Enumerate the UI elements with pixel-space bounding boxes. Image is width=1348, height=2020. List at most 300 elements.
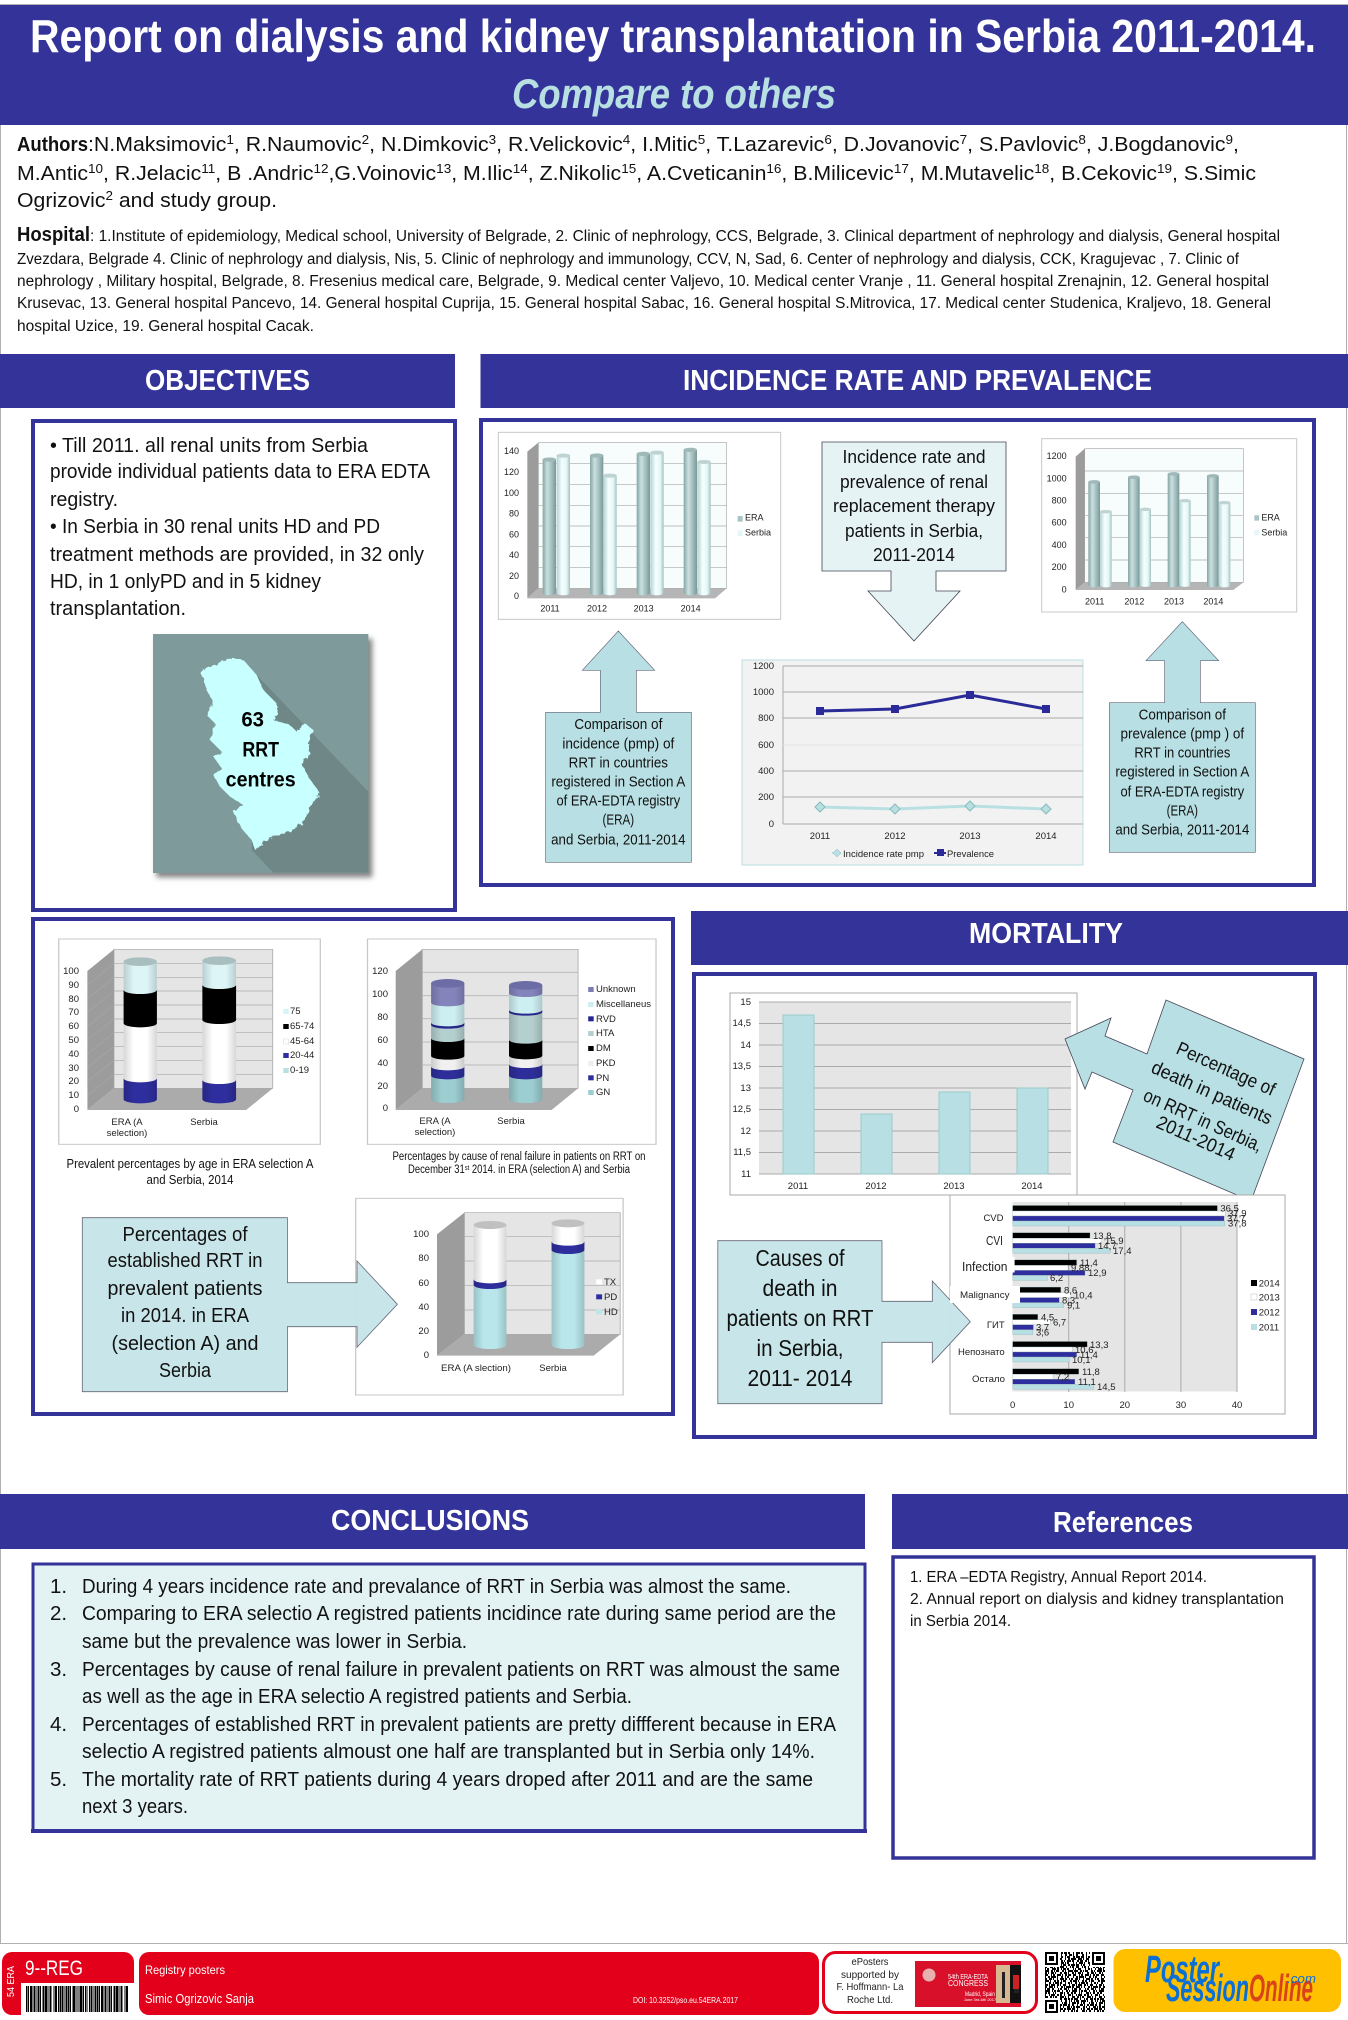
authors: , R.Jelacic <box>103 162 201 185</box>
chart: incidence comparison 3D columns: Serbia <box>745 527 771 537</box>
chart: causes of death: 40 <box>1232 1400 1242 1411</box>
heading: conclusions: CONCLUSIONS <box>331 1505 529 1537</box>
authors: , D.Jovanovic <box>832 133 960 156</box>
chart: percentages by age: 75 <box>290 1006 301 1017</box>
conclusions list: next 3 years. <box>82 1795 188 1818</box>
authors: , T.Lazarevic <box>705 133 824 156</box>
chart: percentage of death per year <box>730 993 1077 1195</box>
chart: percentages by cause of renal failure: ERA (A <box>419 1116 451 1127</box>
chart: percentages by age <box>59 939 320 1144</box>
chart: incidence comparison 3D columns: ERA <box>745 512 763 522</box>
callout: comparison of prevalence: of ERA-EDTA registry <box>1120 785 1245 801</box>
chart: percentages by age: 20 <box>68 1076 79 1087</box>
chart: percentage of death per year: 12 <box>740 1126 751 1137</box>
chart: established RRT modality: Serbia <box>539 1363 567 1374</box>
chart: causes of death: 0 <box>1010 1400 1015 1411</box>
chart: prevalence comparison 3D columns <box>1042 439 1297 612</box>
chart: established RRT modality: 20 <box>418 1326 429 1337</box>
authors: 9 <box>1226 132 1233 147</box>
chart: percentages by age: Serbia <box>190 1117 218 1128</box>
chart: causes of death: 11,1 <box>1078 1377 1096 1388</box>
chart: percentage of death per year: 2012 <box>865 1181 887 1192</box>
chart: causes of death: Остало <box>972 1374 1005 1385</box>
panel: incidence rate and prevalence <box>481 420 1314 885</box>
chart: percentage of death per year: 14,5 <box>732 1018 751 1029</box>
callout: incidence rate and prevalence down arrow: replacement therapy <box>833 495 996 516</box>
chart: percentages by age: 30 <box>68 1063 79 1074</box>
chart: incidence and prevalence in Serbia line chart: 200 <box>758 792 774 803</box>
chart: percentages by age: ERA (A <box>111 1117 143 1128</box>
authors: 13 <box>436 161 451 176</box>
callout: comparison of prevalence: and Serbia, 2011-2014 <box>1115 822 1249 838</box>
hospitals <box>17 224 1280 335</box>
chart: causes of death <box>718 1195 1285 1414</box>
chart: causes of death: 2012 <box>1259 1308 1280 1318</box>
authors: , B.Cekovic <box>1049 162 1157 185</box>
panel: objectives <box>33 421 455 910</box>
footer: category and author strip: Registry posters <box>145 1963 225 1977</box>
authors: , Z.Nikolic <box>528 162 621 185</box>
chart: percentage of death per year: 12,5 <box>732 1104 751 1115</box>
authors: , S.Simic <box>1172 162 1256 185</box>
conclusions list: Percentages by cause of renal failure in prevalent patients on RRT was almoust the same <box>82 1658 840 1681</box>
authors: ,G.Voinovic <box>328 162 436 185</box>
chart: established RRT modality: HD <box>604 1307 618 1318</box>
chart: incidence comparison 3D columns: 120 <box>504 467 519 477</box>
chart: prevalence comparison 3D columns: 2011 <box>1085 596 1104 606</box>
authors: 4 <box>623 132 630 147</box>
title banner <box>0 5 1348 125</box>
chart: prevalence comparison 3D columns: 1200 <box>1047 451 1067 461</box>
chart: prevalence comparison 3D columns: 2014 <box>1203 596 1223 606</box>
chart: percentage of death per year: 13 <box>740 1083 751 1094</box>
chart: incidence comparison 3D columns: 2014 <box>681 603 701 613</box>
chart: percentages by age: 0-19 <box>290 1065 309 1076</box>
references list <box>910 1569 1284 1630</box>
heading: references <box>892 1494 1348 1549</box>
chart: causes of death: CVD <box>983 1213 1004 1224</box>
conclusions list: as well as the age in ERA selectio A registred patients and Serbia. <box>82 1685 632 1708</box>
footer: poster id badge: 54 ERA <box>6 1966 17 1997</box>
callout: causes of death arrow <box>718 1241 970 1404</box>
barcode <box>26 1986 129 2012</box>
callout: causes of death arrow: Causes of <box>756 1245 845 1271</box>
heading: mortality <box>691 911 1348 965</box>
chart: percentages by cause of renal failure: PKD <box>596 1058 616 1069</box>
chart: causes of death: 36,5 <box>1220 1204 1239 1214</box>
chart: prevalence comparison 3D columns: 2013 <box>1164 596 1184 606</box>
chart: percentages by age: 0 <box>74 1104 79 1115</box>
callout: comparison of incidence <box>546 631 691 862</box>
callout: incidence rate and prevalence down arrow: patients in Serbia, <box>845 520 983 541</box>
chart: percentage of death per year: 2011 <box>788 1181 808 1192</box>
chart: percentages by age: 90 <box>68 980 79 991</box>
callout: causes of death arrow: in Serbia, <box>756 1335 844 1361</box>
callout: comparison of incidence: Comparison of <box>574 717 663 733</box>
conclusions list: 3. <box>50 1658 67 1681</box>
panel: demographics charts <box>33 919 673 1414</box>
chart: causes of death: 2013 <box>1259 1292 1280 1304</box>
map: Serbia with 63 RRT centres: 63 <box>241 708 264 732</box>
conclusions list: Comparing to ERA selectio A registred patients incidince rate during same period are the <box>82 1602 836 1625</box>
chart: causes of death: 37,8 <box>1228 1218 1246 1230</box>
objectives text <box>50 434 430 620</box>
chart: percentages by cause of renal failure: GN <box>596 1087 610 1098</box>
chart: incidence comparison 3D columns: 40 <box>509 550 519 560</box>
congress banner: 54th ERA-EDTA <box>948 1974 988 1981</box>
chart: causes of death: 10,4 <box>1074 1290 1092 1301</box>
callout: percentage of death rotated arrow <box>1065 1000 1304 1201</box>
chart: percentages by age: 80 <box>68 994 79 1005</box>
footer: PosterSessionOnline logo: Poster <box>1145 1949 1220 1991</box>
caption: cause chart: st <box>465 1165 469 1172</box>
congress banner: Madrid, Spain <box>965 1992 995 1998</box>
heading: objectives: OBJECTIVES <box>145 365 310 397</box>
chart: causes of death: 10 <box>1063 1400 1074 1411</box>
chart: causes of death: 11,4 <box>1080 1258 1098 1269</box>
callout: comparison of incidence: registered in Section A <box>551 775 686 791</box>
callout: comparison of incidence: of ERA-EDTA registry <box>556 794 681 810</box>
chart: prevalence comparison 3D columns: 400 <box>1052 540 1067 550</box>
authors: , M.Ilic <box>451 162 513 185</box>
chart: incidence comparison 3D columns: 0 <box>514 591 519 601</box>
chart: percentage of death per year: 11,5 <box>733 1147 751 1158</box>
authors <box>17 132 1256 212</box>
chart: incidence comparison 3D columns: 100 <box>504 488 519 498</box>
panel: conclusions <box>31 1564 867 1833</box>
callout: causes of death arrow: 2011- 2014 <box>748 1365 853 1391</box>
callout: comparison of incidence: RRT in countries <box>569 755 668 771</box>
authors: , N.Dimkovic <box>369 133 489 156</box>
hospitals: Zvezdara, Belgrade 4. Clinic of nephrology and dialysis, Nis, 5. Clinic of nephrology and immunology, CCV, N, Sad, 6. Center of nephrology and dialysis, CCK, Kragujevac , 7. Clinic of <box>17 251 1240 268</box>
chart: percentages by cause of renal failure: 0 <box>383 1103 388 1114</box>
chart: causes of death: 15,9 <box>1105 1236 1124 1247</box>
objectives text: • In Serbia in 30 renal units HD and PD <box>50 515 380 538</box>
map: Serbia with 63 RRT centres: centres <box>226 768 296 792</box>
footer: sponsor box: ePosters <box>852 1956 888 1968</box>
callout: percentages of established RRT: (selection A) and <box>112 1332 258 1355</box>
chart: percentages by age: 100 <box>63 966 79 977</box>
authors: Ogrizovic <box>17 189 102 212</box>
authors: 11 <box>201 161 215 176</box>
chart: established RRT modality: 0 <box>424 1350 429 1361</box>
chart: percentage of death per year: 13,5 <box>732 1061 751 1072</box>
authors: 6 <box>824 132 832 147</box>
authors: 1 <box>226 132 234 147</box>
heading: conclusions <box>0 1494 865 1549</box>
chart: causes of death: 3,6 <box>1036 1328 1049 1338</box>
authors: , S.Pavlovic <box>967 133 1078 156</box>
chart: percentages by age: 65-74 <box>290 1021 314 1032</box>
chart: percentages by cause of renal failure: selection) <box>415 1127 455 1138</box>
chart: incidence comparison 3D columns: 60 <box>509 529 519 539</box>
chart: incidence comparison 3D columns: 2011 <box>540 603 560 613</box>
chart: percentages by cause of renal failure: Unknown <box>596 984 636 995</box>
conclusions list: selectio A registred patients almoust one half are transplanted but in Serbia only 14%. <box>82 1740 815 1763</box>
conclusions list: 5. <box>50 1768 67 1791</box>
authors: 7 <box>960 132 967 147</box>
callout: incidence rate and prevalence down arrow: prevalence of renal <box>840 471 988 492</box>
chart: established RRT modality <box>356 1198 623 1395</box>
chart: incidence and prevalence in Serbia line chart: 600 <box>758 740 774 751</box>
hospitals: Krusevac, 13. General hospital Pancevo, 14. General hospital Cuprija, 15. General hospital Sabac, 16. General hospital S.Mitrovica, 17. Medical center Studenica, Kraljevo, 18. General <box>17 295 1271 312</box>
caption: age chart: Prevalent percentages by age in ERA selection A <box>66 1156 314 1171</box>
callout: comparison of prevalence: Comparison of <box>1139 707 1227 723</box>
authors: , B.Milicevic <box>781 162 894 185</box>
chart: causes of death: CVI <box>986 1233 1003 1248</box>
chart: incidence and prevalence in Serbia line chart: 1200 <box>753 661 774 672</box>
chart: percentages by cause of renal failure: Serbia <box>497 1116 525 1127</box>
chart: causes of death: 11,4 <box>1080 1350 1098 1361</box>
conclusions list: During 4 years incidence rate and prevalance of RRT in Serbia was almost the same. <box>82 1575 791 1598</box>
chart: causes of death: Malignancy <box>960 1290 1010 1301</box>
references list: 2. Annual report on dialysis and kidney transplantation <box>910 1591 1284 1608</box>
caption: cause chart: December 31 <box>408 1164 477 1176</box>
subtitle: Compare to others <box>512 70 836 117</box>
chart: percentages by age: 40 <box>68 1049 79 1060</box>
objectives text: registry. <box>50 488 118 511</box>
chart: percentages by cause of renal failure <box>367 939 656 1144</box>
footer: QR code <box>1044 1951 1106 2014</box>
objectives text: provide individual patients data to ERA EDTA <box>50 460 430 483</box>
objectives text: treatment methods are provided, in 32 only <box>50 543 425 566</box>
chart: percentages by age: 20-44 <box>290 1050 314 1061</box>
footer: PosterSessionOnline logo: .com <box>1287 1971 1316 1986</box>
callout: causes of death arrow: death in <box>762 1275 838 1301</box>
callout: comparison of prevalence: (ERA) <box>1167 803 1198 819</box>
chart: causes of death: 2014 <box>1259 1278 1280 1290</box>
chart: incidence and prevalence in Serbia line chart: Prevalence <box>947 849 994 860</box>
authors: 12 <box>313 161 328 176</box>
callout: comparison of prevalence: RRT in countries <box>1134 745 1230 761</box>
footer: poster id badge: 9--REG <box>25 1957 83 1980</box>
chart: incidence comparison 3D columns: 2013 <box>634 603 654 613</box>
chart: prevalence comparison 3D columns: 600 <box>1052 518 1067 528</box>
conclusions list: Percentages of established RRT in prevalent patients are pretty diffferent because in ERA <box>82 1713 836 1736</box>
chart: causes of death: 6,7 <box>1053 1318 1066 1328</box>
conclusions list: 2. <box>50 1602 67 1625</box>
authors: , I.Mitic <box>630 133 698 156</box>
chart: causes of death: 11,8 <box>1082 1367 1100 1378</box>
chart: causes of death: 37,7 <box>1227 1214 1246 1224</box>
chart: incidence comparison 3D columns: 2012 <box>587 603 607 613</box>
chart: causes of death: 17,4 <box>1113 1246 1132 1257</box>
chart: percentages by cause of renal failure: PN <box>596 1073 609 1084</box>
authors: 16 <box>766 161 781 176</box>
objectives text: • Till 2011. all renal units from Serbia <box>50 434 369 457</box>
chart: causes of death: 12,9 <box>1088 1268 1106 1279</box>
congress banner <box>915 1961 1021 2007</box>
callout: comparison of incidence: (ERA) <box>602 812 634 828</box>
callout: comparison of prevalence: prevalence (pmp ) of <box>1120 726 1245 742</box>
chart: percentage of death per year: 2014 <box>1021 1181 1043 1192</box>
footer: category and author strip <box>139 1952 819 2015</box>
hospitals: : 1.Institute of epidemiology, Medical school, University of Belgrade, 2. Clinic of nephrology, CCS, Belgrade, 3. Clinical department of nephrology and dialysis, General hospital <box>90 228 1280 245</box>
conclusions list: same but the prevalence was lower in Serbia. <box>82 1630 467 1653</box>
chart: percentages by cause of renal failure: DM <box>596 1043 611 1054</box>
chart: established RRT modality: 100 <box>413 1229 429 1240</box>
footer: PosterSessionOnline logo <box>1114 1949 1341 2012</box>
callout: comparison of prevalence: registered in Section A <box>1115 765 1250 781</box>
references list: in Serbia 2014. <box>910 1613 1011 1630</box>
authors: 10 <box>88 161 103 176</box>
chart: percentages by cause of renal failure: 60 <box>377 1035 388 1046</box>
chart: prevalence comparison 3D columns: 800 <box>1052 495 1067 505</box>
authors: 19 <box>1157 161 1172 176</box>
caption: cause chart <box>392 1151 646 1176</box>
authors: 5 <box>698 132 705 147</box>
congress banner: CONGRESS <box>948 1979 988 1988</box>
chart: prevalence comparison 3D columns: 0 <box>1062 584 1067 594</box>
chart: prevalence comparison 3D columns: ERA <box>1261 512 1280 522</box>
chart: causes of death: 9,88 <box>1071 1263 1090 1274</box>
authors: 2 <box>105 188 113 203</box>
callout: percentages of established RRT: in 2014. in ERA <box>121 1304 249 1327</box>
authors: Authors <box>17 134 88 156</box>
chart: percentage of death per year: 11 <box>741 1169 751 1180</box>
authors: 2 <box>362 132 369 147</box>
chart: established RRT modality: TX <box>604 1277 617 1288</box>
callout: percentages of established RRT: established RRT in <box>108 1249 262 1272</box>
chart: causes of death: 4,5 <box>1041 1312 1054 1324</box>
callout: incidence rate and prevalence down arrow <box>822 442 1006 641</box>
chart: causes of death: 10,1 <box>1072 1355 1090 1366</box>
chart: percentages by age: 10 <box>68 1090 79 1101</box>
chart: percentages by age: 45-64 <box>290 1036 314 1047</box>
chart: percentage of death per year: 2013 <box>943 1181 965 1192</box>
caption: age chart <box>66 1156 314 1187</box>
chart: percentages by age: 70 <box>68 1007 79 1018</box>
authors: and study group. <box>113 189 277 212</box>
chart: incidence and prevalence in Serbia line chart: 2014 <box>1035 831 1057 842</box>
authors: , B .Andric <box>215 162 313 185</box>
chart: causes of death: 6,2 <box>1050 1273 1063 1284</box>
chart: incidence and prevalence in Serbia line chart: Incidence rate pmp <box>843 849 924 860</box>
conclusions list: The mortality rate of RRT patients during 4 years droped after 2011 and are the same <box>82 1768 813 1791</box>
chart: percentages by cause of renal failure: 120 <box>372 966 388 977</box>
hospitals: Hospital <box>17 224 90 246</box>
callout: comparison of prevalence <box>1109 622 1255 852</box>
footer: sponsor box: F. Hoffmann- La <box>836 1981 904 1993</box>
heading: references: References <box>1053 1507 1193 1539</box>
callout: percentage of death rotated arrow: Percentage of <box>1173 1038 1279 1101</box>
callout: percentage of death rotated arrow: death in patients <box>1148 1057 1275 1129</box>
authors: 18 <box>1034 161 1049 176</box>
authors: , J.Bogdanovic <box>1086 133 1226 156</box>
chart: causes of death: 10,6 <box>1075 1345 1094 1356</box>
panel: mortality <box>694 974 1315 1437</box>
objectives text: transplantation. <box>50 597 186 620</box>
chart: incidence and prevalence in Serbia line chart <box>742 660 1083 865</box>
chart: established RRT modality: PD <box>604 1292 617 1303</box>
chart: causes of death: 8,3 <box>1062 1295 1075 1306</box>
chart: causes of death: 30 <box>1176 1400 1186 1411</box>
chart: incidence and prevalence in Serbia line chart: 2013 <box>959 831 981 842</box>
chart: causes of death: 7,2 <box>1056 1372 1069 1383</box>
chart: percentage of death per year: 14 <box>740 1040 751 1051</box>
authors: , <box>1233 133 1239 156</box>
authors: , M.Mutavelic <box>909 162 1034 185</box>
chart: causes of death: ГИТ <box>987 1320 1005 1331</box>
chart: incidence comparison 3D columns: 140 <box>504 446 519 456</box>
heading: mortality: MORTALITY <box>969 918 1123 950</box>
footer: category and author strip: DOI: 10.3252/pso.eu.54ERA.2017 <box>633 1996 738 2005</box>
chart: prevalence comparison 3D columns: 2012 <box>1124 596 1144 606</box>
map: Serbia with 63 RRT centres: RRT <box>242 738 279 762</box>
chart: prevalence comparison 3D columns: Serbia <box>1261 527 1287 537</box>
chart: percentages by cause of renal failure: 80 <box>377 1012 388 1023</box>
callout: percentages of established RRT: Percentages of <box>122 1223 248 1246</box>
authors: :N.Maksimovic <box>88 133 221 156</box>
chart: causes of death: 9,1 <box>1067 1300 1080 1311</box>
chart: causes of death: Непознато <box>958 1347 1005 1358</box>
chart: causes of death: 13,8 <box>1093 1231 1112 1242</box>
heading: incidence rate and prevalence: INCIDENCE RATE AND PREVALENCE <box>683 365 1152 397</box>
chart: percentages by age: 50 <box>68 1035 79 1046</box>
chart: incidence comparison 3D columns <box>498 432 781 619</box>
authors: 8 <box>1078 132 1086 147</box>
authors: 15 <box>621 161 636 176</box>
hospitals: hospital Uzice, 19. General hospital Cacak. <box>17 318 314 335</box>
chart: incidence comparison 3D columns: 80 <box>509 508 519 518</box>
chart: established RRT modality: 80 <box>418 1253 429 1264</box>
chart: established RRT modality: 40 <box>418 1302 429 1313</box>
chart: causes of death: 13,3 <box>1090 1340 1108 1351</box>
callout: percentage of death rotated arrow: on RRT in Serbia, <box>1140 1085 1265 1157</box>
footer: PosterSessionOnline logo: Session <box>1166 1968 1249 2010</box>
authors: , R.Naumovic <box>234 133 362 156</box>
chart: percentage of death per year: 15 <box>740 997 751 1008</box>
chart: percentages by age: 60 <box>68 1021 79 1032</box>
callout: incidence rate and prevalence down arrow: 2011-2014 <box>873 544 955 565</box>
callout: incidence rate and prevalence down arrow: Incidence rate and <box>842 446 986 467</box>
callout: percentages of established RRT <box>82 1218 397 1392</box>
chart: causes of death: 2011 <box>1259 1322 1279 1334</box>
callout: comparison of incidence: incidence (pmp) of <box>562 736 675 752</box>
heading: objectives <box>0 354 455 408</box>
conclusions list <box>50 1575 840 1818</box>
chart: causes of death: 14,5 <box>1097 1382 1116 1393</box>
panel: references <box>893 1557 1314 1858</box>
caption: cause chart: Percentages by cause of renal failure in patients on RRT on <box>392 1151 646 1163</box>
chart: percentages by cause of renal failure: 20 <box>377 1081 388 1092</box>
chart: incidence comparison 3D columns: 20 <box>509 571 519 581</box>
callout: percentages of established RRT: Serbia <box>159 1359 212 1382</box>
chart: causes of death: 37,9 <box>1228 1208 1246 1220</box>
chart: causes of death: 3,7 <box>1036 1322 1049 1334</box>
authors: 17 <box>894 161 909 176</box>
chart: causes of death: 20 <box>1120 1400 1130 1411</box>
objectives text: HD, in 1 onlyPD and in 5 kidney <box>50 570 322 593</box>
chart: incidence and prevalence in Serbia line chart: 1000 <box>753 687 774 698</box>
conclusions list: 1. <box>50 1575 67 1598</box>
callout: causes of death arrow: patients on RRT <box>726 1305 874 1331</box>
callout: percentages of established RRT: prevalent patients <box>108 1277 262 1300</box>
chart: causes of death: Infection <box>962 1259 1008 1274</box>
chart: percentages by cause of renal failure: 40 <box>377 1058 388 1069</box>
chart: incidence and prevalence in Serbia line chart: 400 <box>758 766 774 777</box>
map: Serbia with 63 RRT centres <box>153 634 372 877</box>
chart: incidence and prevalence in Serbia line chart: 2011 <box>810 831 830 842</box>
chart: percentages by cause of renal failure: 100 <box>372 989 388 1000</box>
footer: sponsor box: supported by <box>841 1969 900 1981</box>
heading: incidence rate and prevalence <box>480 354 1348 408</box>
chart: established RRT modality: 60 <box>418 1278 429 1289</box>
references list: 1. ERA –EDTA Registry, Annual Report 2014. <box>910 1569 1207 1586</box>
hospitals: nephrology , Military hospital, Belgrade, 8. Fresenius medical care, Belgrade, 9. Medical center Valjevo, 10. Medical center Vranje , 11. General hospital Zrenajnin, 12. General hospital <box>17 273 1269 290</box>
congress banner: June 3rd-6th 2017 <box>964 1997 997 2002</box>
footer: category and author strip: Simic Ogrizovic Sanja <box>145 1991 255 2006</box>
